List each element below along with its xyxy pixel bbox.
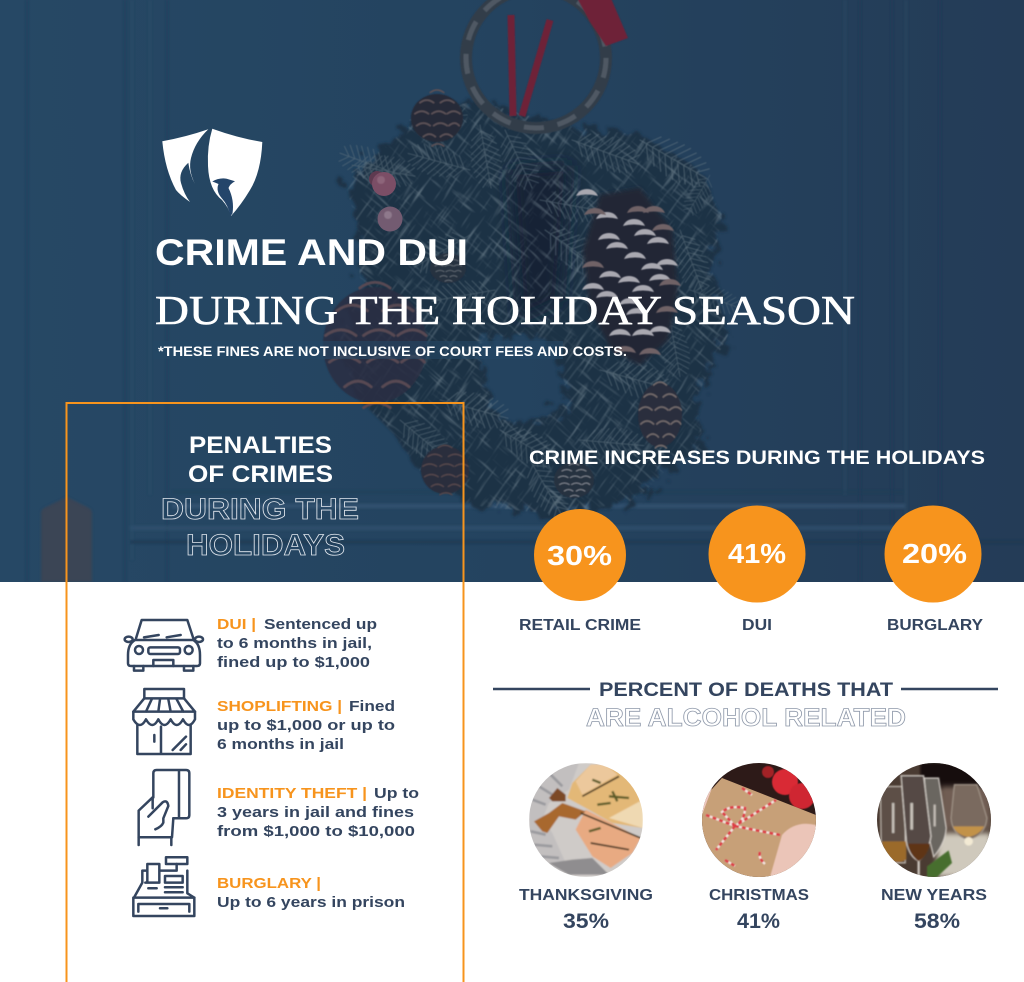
small pine cones <box>323 90 682 498</box>
label: new years: NEW YEARS <box>881 887 987 904</box>
photo: new year glasses <box>877 763 991 877</box>
stat: burglary 20% <box>884 506 983 634</box>
penalty: DUI <box>125 616 377 671</box>
red ribbon <box>511 0 628 116</box>
penalty: shoplifting <box>133 689 395 754</box>
penalty: shoplifting: Fined <box>349 698 395 715</box>
penalty: shoplifting: up to $1,000 or up to <box>217 717 395 734</box>
penalty: burglary <box>133 857 405 916</box>
penalty: DUI: Sentenced up <box>264 616 377 633</box>
penalty: shoplifting: SHOPLIFTING | <box>217 698 342 715</box>
stat: burglary 20%: BURGLARY <box>887 617 983 634</box>
panel: penalties frame <box>66 403 464 982</box>
icon: car <box>125 620 203 671</box>
large pine cone <box>576 188 681 365</box>
penalty: identity theft: 3 years in jail and fines <box>217 804 414 821</box>
note highlight strip <box>153 341 563 359</box>
icon: cash register <box>133 857 194 916</box>
icon: hand holding card <box>139 770 189 845</box>
heading: percent of deaths: PERCENT OF DEATHS THAT <box>599 679 893 701</box>
hero: door with wreath photo <box>0 0 1024 582</box>
penalty: identity theft: Up to <box>374 785 419 802</box>
penalties heading <box>161 432 359 562</box>
penalty: DUI: DUI | <box>217 616 256 633</box>
penalty: DUI: to 6 months in jail, <box>217 635 372 652</box>
penalty: identity theft <box>139 770 419 845</box>
photo: thanksgiving turkey <box>529 763 643 877</box>
label: christmas: 41% <box>737 910 780 933</box>
label: new years: 58% <box>914 910 960 933</box>
penalty: burglary: Up to 6 years in prison <box>217 894 405 911</box>
door hinge plate <box>41 497 92 582</box>
stat: retail crime 30% <box>519 509 641 634</box>
stat: retail crime 30%: 30% <box>547 540 612 571</box>
penalty: burglary: BURGLARY | <box>217 875 321 892</box>
stat: retail crime 30%: RETAIL CRIME <box>519 617 641 634</box>
heading: crime increases: CRIME INCREASES DURING THE HOLIDAYS <box>529 448 985 469</box>
penalty: identity theft: IDENTITY THEFT | <box>217 785 367 802</box>
label: christmas <box>709 887 809 933</box>
dark wreath centre shadow <box>510 165 570 320</box>
stat: DUI 41% <box>708 506 806 634</box>
penalty: shoplifting: 6 months in jail <box>217 736 344 753</box>
berries <box>369 171 402 232</box>
penalty: DUI: fined up to $1,000 <box>217 654 370 671</box>
stat: DUI 41%: DUI <box>742 617 772 634</box>
penalty: identity theft: from $1,000 to $10,000 <box>217 823 415 840</box>
stat: burglary 20%: 20% <box>902 538 967 569</box>
penalties heading: PENALTIES <box>189 432 332 459</box>
title line 1: CRIME AND DUI <box>155 232 468 273</box>
label: thanksgiving <box>519 887 653 933</box>
heading: percent of deaths <box>493 679 998 732</box>
label: thanksgiving: 35% <box>563 910 609 933</box>
penalties heading: HOLIDAYS <box>186 529 345 562</box>
heading: percent of deaths: ARE ALCOHOL RELATED <box>586 704 906 732</box>
footnote: *THESE FINES ARE NOT INCLUSIVE OF COURT FEES AND COSTS. <box>158 344 627 359</box>
wreath <box>323 0 739 520</box>
label: new years <box>881 887 987 933</box>
label: christmas: CHRISTMAS <box>709 887 809 904</box>
needle texture layers <box>348 103 728 514</box>
photo: christmas gift <box>702 763 816 877</box>
icon: storefront <box>133 689 195 754</box>
logo: shield <box>162 129 262 216</box>
stat: DUI 41%: 41% <box>728 538 786 569</box>
label: thanksgiving: THANKSGIVING <box>519 887 653 904</box>
pine needle sprigs <box>335 102 742 523</box>
penalties heading: DURING THE <box>161 493 359 526</box>
wreath hanger ring <box>466 0 606 128</box>
title line 2: DURING THE HOLIDAY SEASON <box>155 287 855 333</box>
penalties heading: OF CRIMES <box>188 461 333 488</box>
